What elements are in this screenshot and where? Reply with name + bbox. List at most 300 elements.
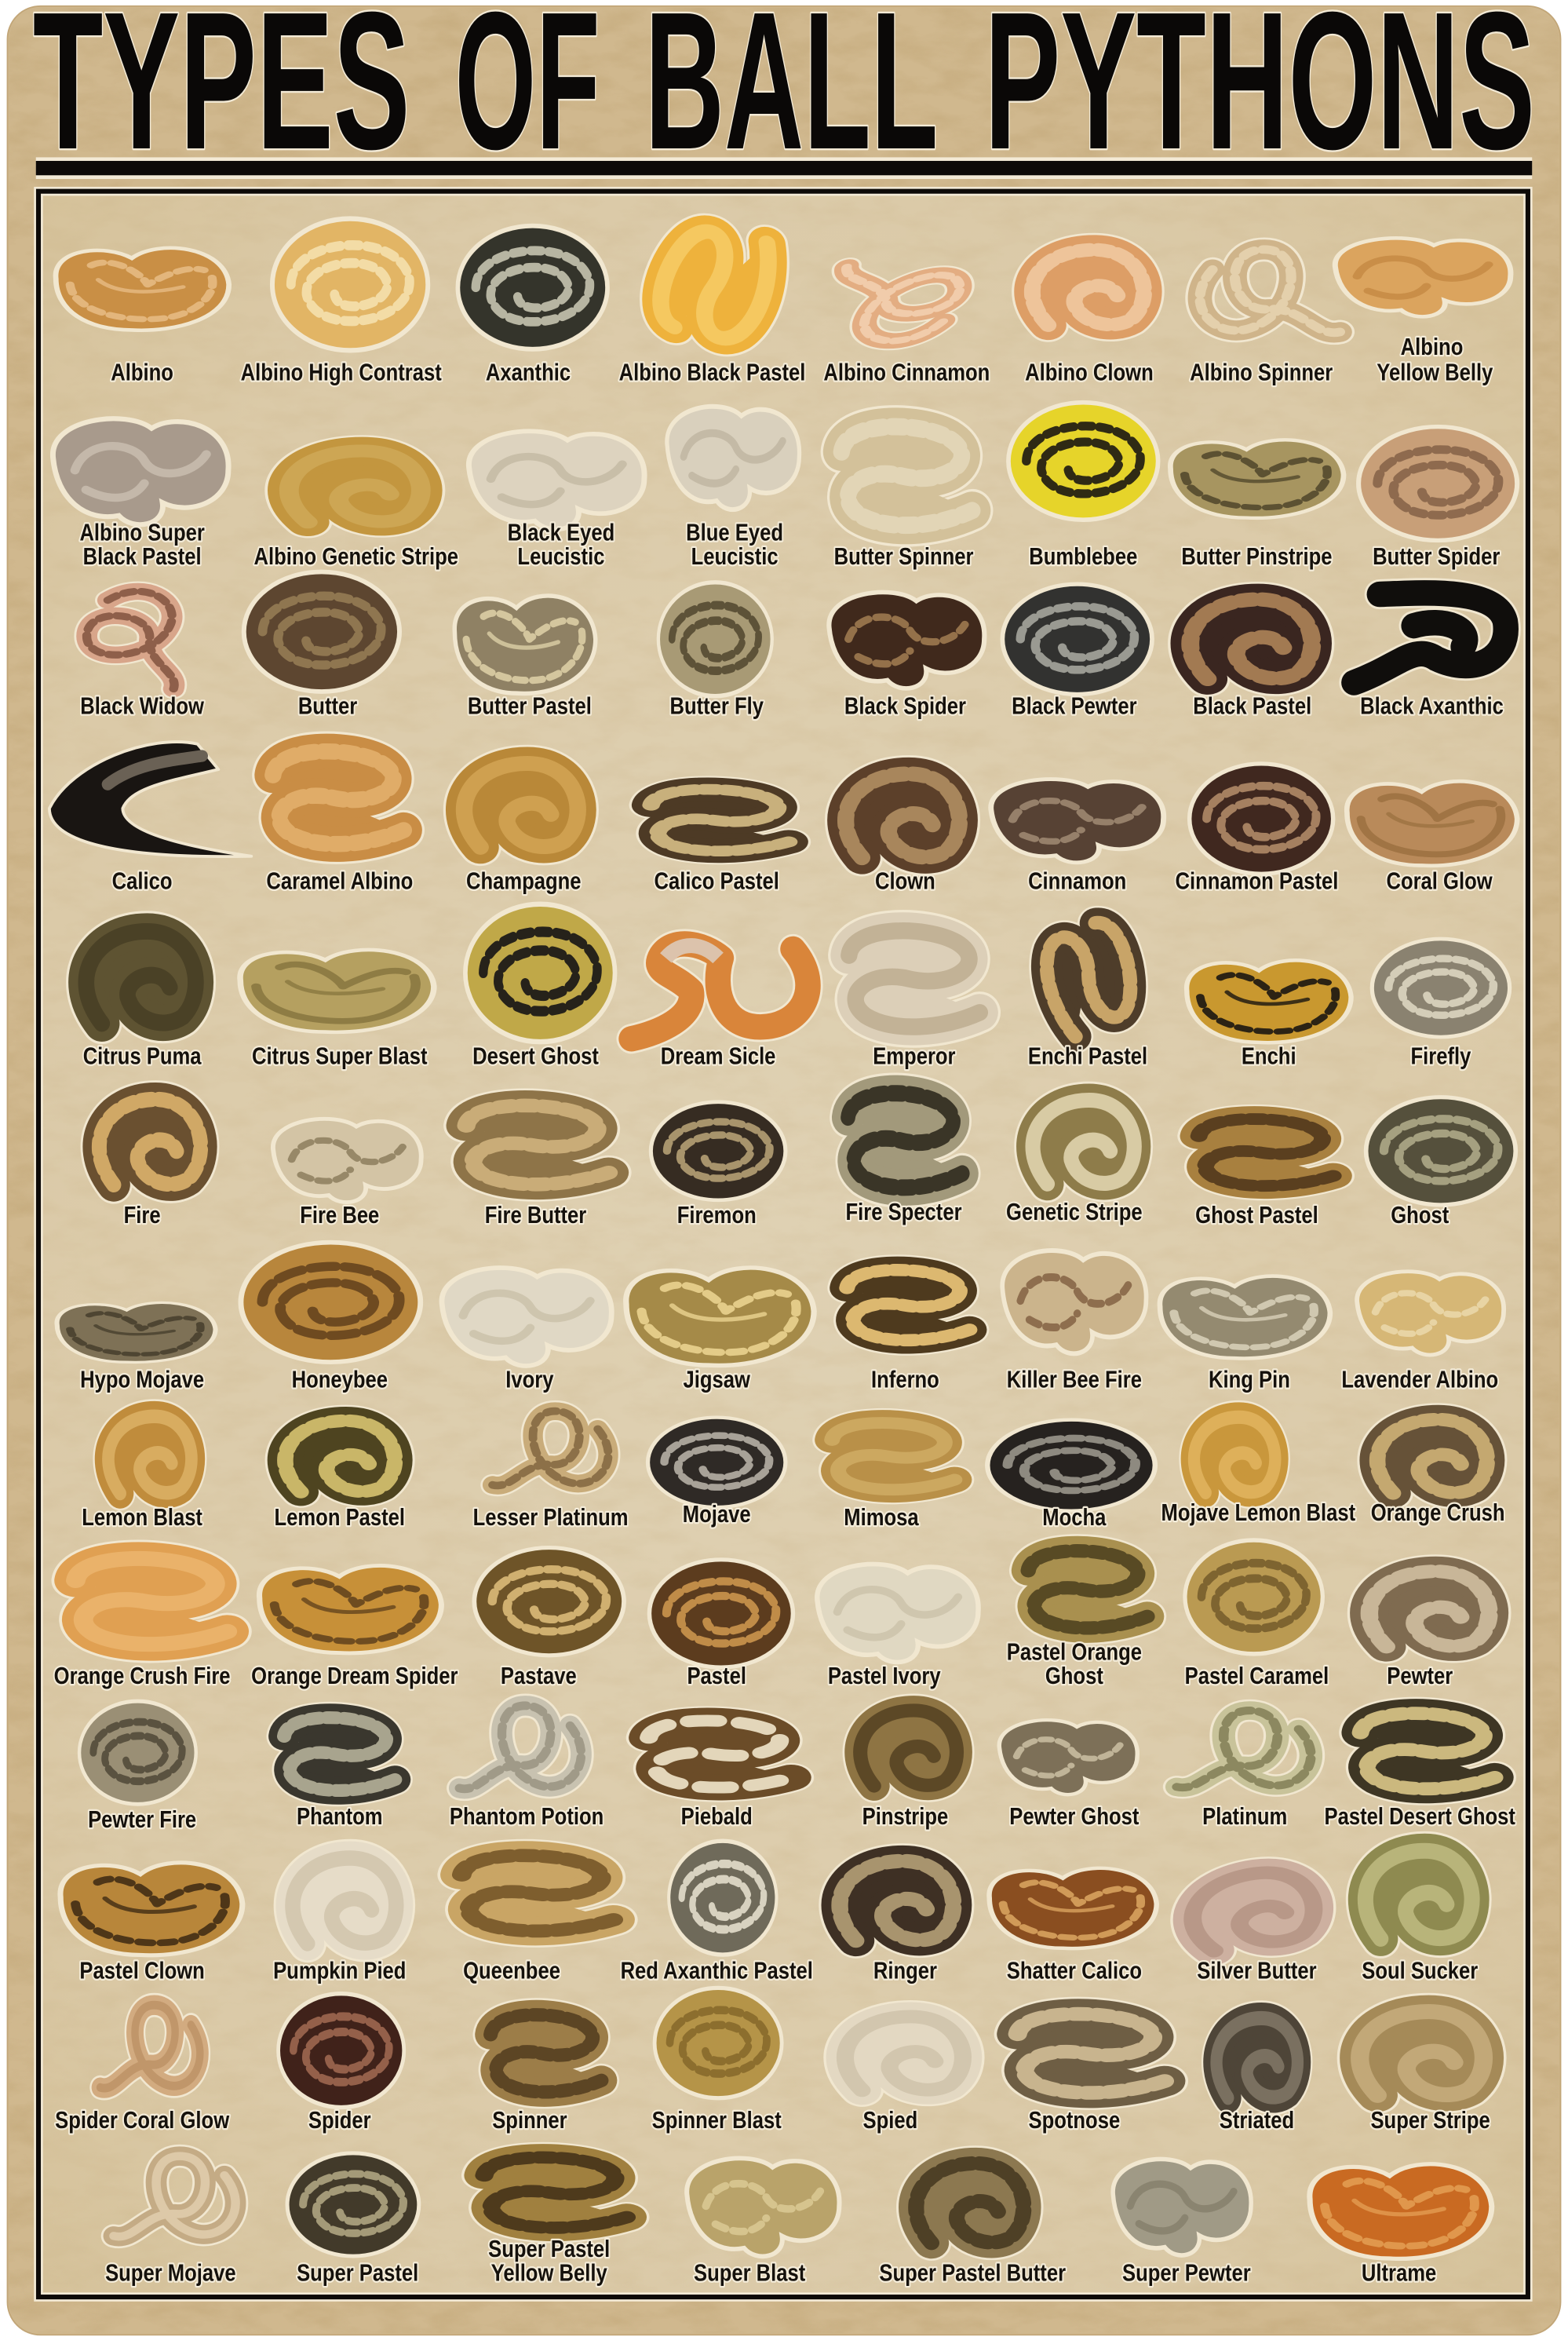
card: Striated — [1216, 2018, 1297, 2134]
row 6 — [99, 1094, 1515, 1228]
row 1 — [56, 214, 1511, 385]
snake illustration — [240, 950, 434, 1032]
card: Citrus Puma — [83, 931, 202, 1069]
card: Firemon — [651, 1102, 786, 1228]
snake illustration — [1377, 1419, 1487, 1493]
row 10 — [79, 1701, 1516, 1833]
snake illustration — [651, 1102, 786, 1200]
name: Citrus Super Blast — [252, 1043, 428, 1069]
snake illustration — [832, 1423, 954, 1490]
name: Super Pastel — [297, 2260, 418, 2286]
snake illustration — [1191, 600, 1312, 679]
snake illustration — [99, 1099, 201, 1185]
name: Champagne — [466, 868, 582, 894]
name: Coral Glow — [1386, 868, 1493, 894]
card: Spinner — [490, 2015, 601, 2134]
snake illustration — [841, 427, 972, 525]
name: Caramel Albino — [266, 868, 413, 894]
snake illustration — [273, 1119, 421, 1203]
card: Pewter Fire — [79, 1701, 196, 1833]
name: Firefly — [1411, 1043, 1471, 1069]
name: Soul Sucker — [1362, 1958, 1478, 1984]
card: Super Pastel — [287, 2153, 419, 2286]
name: Pinstripe — [862, 1803, 948, 1830]
snake illustration — [284, 1718, 395, 1791]
title — [33, 0, 1535, 191]
snake illustration — [687, 2158, 840, 2256]
snake illustration — [860, 1711, 957, 1786]
snake illustration — [1187, 1866, 1318, 1954]
card: Black Eyed Leucistic — [469, 431, 644, 569]
snake illustration — [1033, 1100, 1134, 1184]
snake illustration — [667, 407, 800, 509]
snake illustration — [817, 1564, 979, 1662]
snake illustration — [1185, 1540, 1322, 1654]
card: Axanthic — [458, 226, 607, 385]
card: Lavender Albino — [1341, 1272, 1504, 1393]
name: King Pin — [1209, 1366, 1290, 1393]
name: Black Eyed — [508, 519, 614, 546]
name: Genetic Stripe — [1006, 1199, 1143, 1225]
name: Butter Pastel — [468, 693, 592, 719]
snake illustration — [651, 214, 781, 352]
card: Ghost Pastel — [1195, 1119, 1333, 1228]
snake illustration — [1190, 764, 1333, 874]
name: Cinnamon Pastel — [1176, 868, 1338, 894]
card: Genetic Stripe — [1006, 1100, 1143, 1225]
name: Firemon — [677, 1202, 757, 1228]
snake illustration — [1177, 1711, 1311, 1787]
snake illustration — [459, 1706, 581, 1789]
snake illustration — [1199, 1119, 1333, 1186]
snake illustration — [1216, 2018, 1297, 2098]
card: Butter — [244, 571, 399, 719]
card: Albino Yellow Belly — [1335, 238, 1511, 385]
name: Black Spider — [844, 693, 966, 719]
card: Super Stripe — [1360, 2012, 1490, 2134]
snake illustration — [848, 1094, 962, 1188]
card: Spider — [279, 1994, 404, 2134]
snake illustration — [114, 2156, 235, 2236]
snake illustration — [79, 1701, 196, 1804]
name: Spinner — [492, 2107, 567, 2134]
row 11 — [60, 1841, 1478, 1984]
card: Albino Clown — [1025, 250, 1154, 385]
snake illustration — [845, 2017, 963, 2090]
snake illustration — [847, 1270, 969, 1340]
card: Clown — [846, 774, 959, 894]
card: Albino Yellow Belly: Yellow Belly — [1377, 359, 1493, 385]
card: Ivory — [442, 1268, 611, 1393]
card: Orange Dream Spider — [251, 1565, 458, 1689]
name: Platinum — [1202, 1803, 1287, 1830]
snake illustration — [1160, 1276, 1330, 1358]
snake illustration — [669, 1841, 776, 1955]
card: Pastel Orange Ghost — [1007, 1551, 1147, 1689]
card: Black Axanthic — [1354, 593, 1506, 719]
name: Black Pewter — [1012, 693, 1137, 719]
card: Silver Butter — [1187, 1866, 1318, 1984]
snake illustration — [1369, 1572, 1489, 1647]
card: Mocha — [987, 1420, 1155, 1530]
snake illustration — [465, 904, 615, 1042]
card: Super Pastel Butter — [879, 2163, 1066, 2286]
snake illustration — [75, 1558, 228, 1645]
snake illustration — [626, 1268, 814, 1366]
snake illustration — [474, 1548, 624, 1656]
name: Super Mojave — [105, 2260, 236, 2286]
snake illustration — [1358, 427, 1517, 540]
name: Blue Eyed — [686, 519, 783, 546]
name: Calico Pastel — [654, 868, 779, 894]
card: Inferno — [847, 1270, 969, 1393]
snake illustration — [260, 1565, 441, 1653]
snake illustration — [991, 780, 1164, 863]
name: Hypo Mojave — [80, 1366, 204, 1393]
name: Black Pastel — [1193, 693, 1311, 719]
name: Pastel — [687, 1663, 746, 1689]
card: Black Pastel — [1191, 600, 1312, 719]
card: Super Pastel Yellow Belly: Yellow Belly — [491, 2260, 607, 2286]
snake illustration — [57, 1302, 216, 1362]
card: Black Eyed Leucistic: Leucistic — [517, 543, 604, 569]
row 12 — [55, 1988, 1490, 2134]
name: Pewter Fire — [88, 1806, 196, 1833]
card: Dream Sicle — [632, 944, 808, 1069]
card: Butter Spider — [1358, 427, 1517, 569]
snake illustration — [272, 219, 428, 350]
card: Soul Sucker — [1362, 1851, 1478, 1984]
card: Pinstripe — [860, 1711, 957, 1830]
snake illustration — [53, 418, 228, 524]
snake illustration — [916, 2163, 1023, 2243]
snake illustration — [1310, 2164, 1492, 2258]
name: Albino Spinner — [1190, 359, 1333, 385]
row 9 — [54, 1540, 1489, 1689]
card: Calico — [49, 742, 251, 894]
card: Phantom — [284, 1718, 395, 1830]
name: Pewter — [1387, 1663, 1453, 1689]
snake illustration — [846, 240, 969, 349]
name: Ghost Pastel — [1195, 1202, 1318, 1228]
card: Ghost — [1366, 1097, 1515, 1228]
card: Albino Super Black Pastel — [53, 418, 228, 569]
name: Albino High Contrast — [241, 359, 442, 385]
card: Super Pastel Yellow Belly — [484, 2157, 626, 2286]
snake illustration — [87, 591, 174, 689]
name: Piebald — [681, 1803, 753, 1830]
card: Jigsaw — [626, 1268, 814, 1393]
name: Bumblebee — [1029, 543, 1137, 569]
snake illustration — [655, 1988, 782, 2098]
card: Butter Fly — [658, 582, 772, 719]
card: Pumpkin Pied — [273, 1858, 406, 1984]
card: Fire Specter — [845, 1094, 962, 1225]
name: Pastel Orange — [1007, 1638, 1142, 1665]
card: Emperor — [849, 931, 979, 1069]
card: Pewter Ghost — [999, 1720, 1140, 1830]
card: Fire — [99, 1099, 201, 1228]
card: Desert Ghost — [465, 904, 615, 1069]
snake illustration — [289, 451, 421, 522]
name: Enchi — [1242, 1043, 1296, 1069]
card: Pastel Ivory — [817, 1564, 979, 1689]
name: Spied — [862, 2107, 917, 2134]
name: Spider Coral Glow — [55, 2107, 229, 2134]
name: Pastave — [501, 1663, 577, 1689]
card: Albino Super Black Pastel: Black Pastel — [83, 543, 202, 569]
card: Cinnamon Pastel — [1176, 764, 1338, 894]
snake illustration — [100, 2005, 200, 2088]
name: Mojave — [683, 1501, 751, 1528]
card: Super Blast — [687, 2158, 840, 2286]
name: Lemon Pastel — [275, 1504, 405, 1530]
card: Pastel — [649, 1560, 793, 1689]
card: Blue Eyed Leucistic — [667, 407, 800, 569]
name: Ultrame — [1362, 2260, 1436, 2286]
card: Spotnose — [1018, 2014, 1165, 2134]
snake illustration — [651, 790, 789, 851]
card: Albino Cinnamon — [823, 240, 990, 385]
card: Super Mojave — [105, 2156, 236, 2286]
snake illustration — [490, 2015, 601, 2092]
name: Ghost — [1391, 1202, 1449, 1228]
name: Spinner Blast — [652, 2107, 782, 2134]
name: Albino Genetic Stripe — [254, 543, 458, 569]
name: Striated — [1220, 2107, 1294, 2134]
name: Butter Spider — [1373, 543, 1500, 569]
snake illustration — [648, 1418, 786, 1507]
snake illustration — [60, 1863, 242, 1955]
name: Albino — [111, 359, 173, 385]
name: Spotnose — [1029, 2107, 1120, 2134]
name: Pastel Ivory — [828, 1663, 941, 1689]
card: Spied — [845, 2017, 963, 2134]
row 13 — [105, 2153, 1492, 2286]
name: Butter Fly — [669, 693, 764, 719]
snake illustration — [829, 592, 984, 688]
snake illustration — [493, 1411, 608, 1485]
card: Lesser Platinum — [473, 1411, 629, 1530]
snake illustration — [285, 1421, 395, 1492]
name: Killer Bee Fire — [1007, 1366, 1142, 1393]
snake illustration — [1002, 1250, 1147, 1353]
name: Dream Sicle — [661, 1043, 775, 1069]
card: Killer Bee Fire — [1002, 1250, 1147, 1393]
card: Albino Black Pastel — [619, 214, 805, 385]
snake illustration — [442, 1268, 611, 1366]
card: Black Widow — [80, 591, 204, 719]
snake illustration — [840, 1861, 954, 1941]
snake illustration — [458, 226, 607, 349]
snake illustration — [461, 1856, 614, 1931]
card: Albino — [56, 248, 229, 385]
snake illustration — [999, 1720, 1137, 1795]
card: Mojave — [648, 1418, 786, 1528]
card: Bumblebee — [1008, 403, 1158, 569]
card: Cinnamon — [991, 780, 1164, 894]
card: Butter Pinstripe — [1170, 440, 1344, 569]
name: Axanthic — [486, 359, 571, 385]
card: Pastel Caramel — [1185, 1540, 1329, 1689]
snake illustration — [1360, 2012, 1483, 2095]
snake illustration — [293, 1858, 396, 1944]
snake illustration — [1018, 2014, 1165, 2093]
snake illustration — [466, 1105, 609, 1185]
name: Fire Butter — [485, 1202, 586, 1228]
name: Inferno — [871, 1366, 939, 1393]
row 2 — [53, 403, 1517, 569]
name: Super Blast — [694, 2260, 806, 2286]
name: Ivory — [505, 1366, 554, 1393]
snake illustration — [846, 774, 959, 858]
name: Butter — [298, 693, 357, 719]
card: Spider Coral Glow — [55, 2005, 229, 2134]
row 4 — [49, 742, 1517, 894]
title rule — [36, 157, 1532, 179]
name: Queenbee — [463, 1958, 560, 1984]
snake illustration — [469, 431, 644, 529]
name: Spider — [308, 2107, 371, 2134]
card: Albino Genetic Stripe — [254, 451, 458, 569]
snake illustration — [1187, 960, 1351, 1042]
snake illustration — [649, 1560, 793, 1667]
name: Super Stripe — [1370, 2107, 1490, 2134]
card: Pewter — [1369, 1572, 1489, 1689]
name: Super Pastel — [488, 2236, 610, 2262]
card: Butter Pastel — [454, 596, 596, 719]
name: Albino Black Pastel — [619, 359, 805, 385]
card: Fire Bee — [273, 1119, 421, 1228]
row 7 — [57, 1243, 1504, 1393]
name: Albino Super — [79, 519, 205, 546]
card: Pastel Orange Ghost: Ghost — [1045, 1663, 1103, 1689]
snake illustration — [1372, 939, 1510, 1037]
row 5 — [83, 904, 1510, 1069]
name: Clown — [875, 868, 935, 894]
card: Ultrame — [1310, 2164, 1492, 2286]
snake illustration — [244, 571, 399, 692]
name: Butter Pinstripe — [1181, 543, 1333, 569]
card: Champagne — [464, 764, 582, 894]
snake illustration — [108, 1416, 191, 1493]
name: Fire Bee — [300, 1202, 379, 1228]
name: Mojave Lemon Blast — [1161, 1499, 1356, 1526]
name: Albino Cinnamon — [823, 359, 990, 385]
row 8 — [82, 1411, 1505, 1530]
snake illustration — [1037, 918, 1143, 1040]
card: Black Spider — [829, 592, 984, 719]
card: Citrus Super Blast — [240, 950, 434, 1069]
card: Lemon Blast — [82, 1416, 203, 1530]
name: Pastel Desert Ghost — [1325, 1803, 1516, 1830]
card: Coral Glow — [1347, 781, 1517, 894]
snake illustration — [49, 742, 251, 856]
name: Pastel Clown — [79, 1958, 205, 1984]
row 3 — [80, 571, 1506, 719]
snake illustration — [1354, 593, 1506, 683]
card: Red Axanthic Pastel — [621, 1841, 813, 1984]
card: Pastel Clown — [60, 1863, 242, 1984]
name: Ringer — [873, 1958, 937, 1984]
snake illustration — [1113, 2160, 1251, 2255]
name: Mocha — [1042, 1504, 1107, 1530]
card: Blue Eyed Leucistic: Leucistic — [691, 543, 779, 569]
card: Queenbee — [461, 1856, 614, 1984]
name: Mimosa — [844, 1504, 919, 1530]
card: Enchi — [1187, 960, 1351, 1069]
card: Caramel Albino — [266, 751, 413, 894]
card: Firefly — [1372, 939, 1510, 1069]
snake illustration — [649, 1721, 791, 1787]
snake illustration — [86, 931, 195, 1024]
snake illustration — [1200, 250, 1340, 333]
name: Lesser Platinum — [473, 1504, 629, 1530]
card: Black Pewter — [1002, 584, 1152, 719]
snake illustration — [273, 751, 403, 844]
card: Super Pewter — [1113, 2160, 1251, 2286]
name: Albino — [1401, 334, 1463, 360]
snake illustration — [287, 2153, 419, 2256]
name: Desert Ghost — [472, 1043, 599, 1069]
card: Honeybee — [241, 1243, 421, 1393]
snake illustration — [1194, 1417, 1275, 1492]
name: Citrus Puma — [83, 1043, 202, 1069]
name: Phantom — [297, 1803, 383, 1830]
snake illustration — [658, 582, 772, 696]
snake illustration — [484, 2157, 626, 2228]
name: Enchi Pastel — [1028, 1043, 1147, 1069]
name: Honeybee — [292, 1366, 388, 1393]
card: Platinum — [1177, 1711, 1311, 1830]
name: Black Axanthic — [1360, 693, 1504, 719]
snake illustration — [454, 596, 596, 694]
name: Black Widow — [80, 693, 204, 719]
snake illustration — [849, 931, 979, 1027]
snake illustration — [1170, 440, 1344, 518]
card: Phantom Potion — [450, 1706, 603, 1830]
name: Lavender Albino — [1341, 1366, 1498, 1393]
card: Mimosa — [832, 1423, 954, 1530]
card: Pastave — [474, 1548, 624, 1689]
snake illustration — [1335, 238, 1511, 316]
card: Orange Crush — [1371, 1419, 1505, 1526]
name: Pewter Ghost — [1009, 1803, 1140, 1830]
name: Shatter Calico — [1007, 1958, 1142, 1984]
card: Enchi Pastel — [1028, 918, 1147, 1069]
card: Spinner Blast — [652, 1988, 782, 2134]
name: Pumpkin Pied — [273, 1958, 406, 1984]
snake illustration — [279, 1994, 404, 2108]
name: Butter Spinner — [834, 543, 973, 569]
name: Orange Dream Spider — [251, 1663, 458, 1689]
name: Super Pewter — [1122, 2260, 1251, 2286]
snake illustration — [1008, 403, 1158, 520]
name: Jigsaw — [683, 1366, 750, 1393]
snake illustration — [1357, 1272, 1504, 1355]
snake illustration — [1002, 584, 1152, 694]
snake illustration — [990, 1868, 1157, 1948]
name: Calico — [112, 868, 173, 894]
snake illustration — [632, 944, 808, 1039]
card: Albino High Contrast — [241, 219, 442, 385]
name: Lemon Blast — [82, 1504, 203, 1530]
name: Pastel Caramel — [1185, 1663, 1329, 1689]
name: Phantom Potion — [450, 1803, 603, 1830]
snake illustration — [1028, 1551, 1147, 1628]
name: Albino Clown — [1025, 359, 1154, 385]
card: Butter Spinner — [834, 427, 973, 569]
